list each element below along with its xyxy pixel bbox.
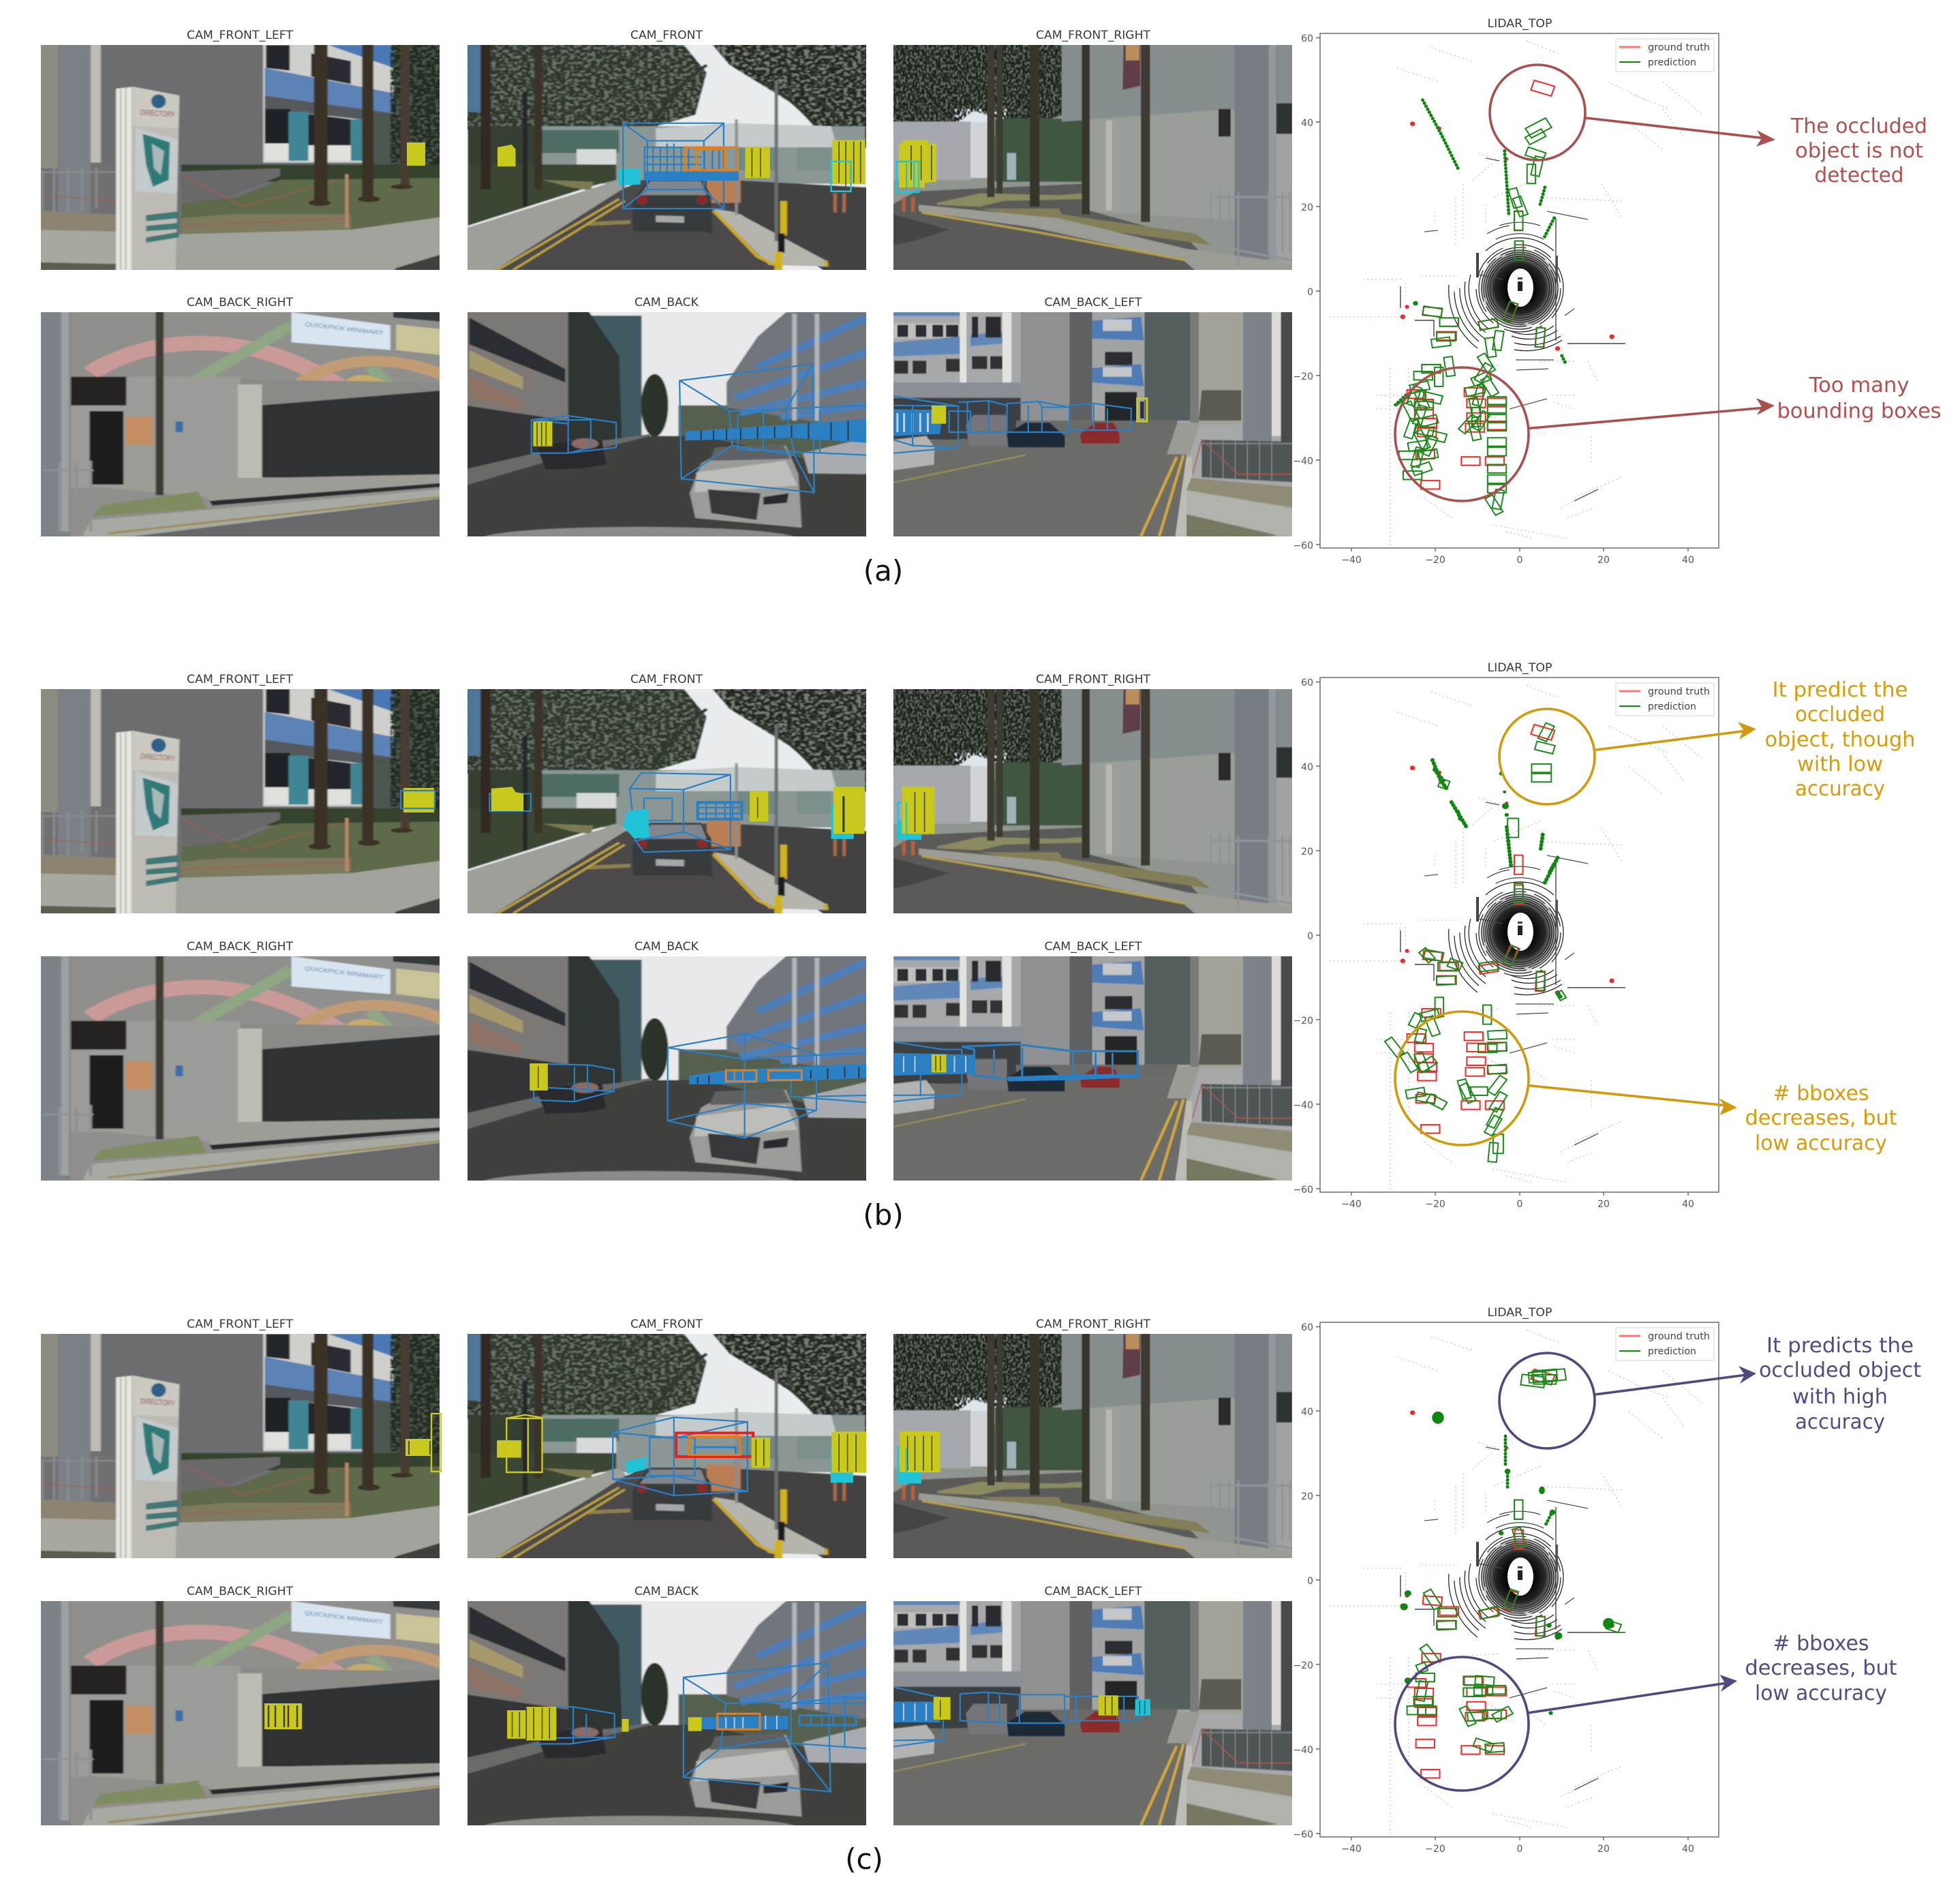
caption (b): (b) [863,1198,904,1232]
callout text: bboxes decrease (c) [1745,1632,1897,1705]
callout text: too many bounding boxes [1777,374,1941,423]
camera panel: CAM_FRONT_LEFT (a) [29,29,455,275]
caption (a): (a) [863,554,903,588]
legend [1616,683,1714,716]
axis ticks: 0 [1307,931,1313,942]
axis ticks: 20 [1301,847,1313,857]
camera panel: CAM_FRONT_LEFT (b) [29,673,455,919]
camera panel: CAM_FRONT_RIGHT (a): CAM_FRONT_RIGHT [1036,29,1151,42]
axis ticks: 20 [1301,1491,1313,1502]
camera panel: CAM_BACK_RIGHT (c): CAM_BACK_RIGHT [187,1585,294,1598]
arrow: too many boxes (a) [1528,398,1775,428]
axis ticks: −20 [1425,555,1445,566]
camera panel: CAM_FRONT (b) [453,673,882,927]
camera panel: CAM_FRONT_LEFT (b): CAM_FRONT_LEFT [187,673,294,686]
axis ticks: 40 [1301,1407,1313,1418]
camera panel: CAM_FRONT_RIGHT (c): CAM_FRONT_RIGHT [1036,1318,1151,1331]
axis ticks: 60 [1301,678,1313,688]
callout text: too many bounding boxes: bounding boxes [1777,399,1941,423]
camera panel: CAM_FRONT_RIGHT (a) [885,29,1299,284]
figure row (c) [29,1306,1921,1876]
axis ticks: −20 [1425,1199,1445,1210]
axis ticks: −20 [1293,1660,1313,1671]
callout text: occluded not detected: detected [1814,164,1904,187]
axis ticks: 40 [1682,1844,1694,1855]
callout ring: too many boxes (a) [1395,367,1529,501]
camera panel: CAM_FRONT_RIGHT (b): CAM_FRONT_RIGHT [1036,673,1151,686]
camera panel: CAM_FRONT (c) [453,1318,882,1572]
arrow: bboxes (c) [1528,1675,1737,1713]
camera panel: CAM_FRONT (c): CAM_FRONT [630,1318,703,1331]
LiDAR chart: LIDAR_TOP (c) [1293,1306,1719,1855]
camera panel: CAM_BACK_LEFT (a): CAM_BACK_LEFT [1044,296,1142,309]
axis ticks: 60 [1301,1322,1313,1333]
callout text: predicts occluded, low accuracy: with low [1797,752,1883,776]
camera panel: CAM_FRONT (a): CAM_FRONT [630,29,703,42]
camera panel: CAM_BACK (c) [453,1585,882,1840]
axis ticks: −40 [1341,1844,1362,1855]
callout text: predicts occluded, high accuracy: with high [1792,1385,1888,1409]
arrow: occluded object (b) [1595,722,1756,750]
callout text: bboxes decrease (c): decreases, but [1745,1656,1897,1680]
axis ticks: −20 [1425,1844,1445,1855]
legend: prediction [1648,1346,1696,1357]
axis ticks: −20 [1293,371,1313,382]
camera panel: CAM_BACK_RIGHT (c) [29,1585,453,1832]
callout text: bboxes decrease (b): decreases, but [1745,1106,1897,1130]
axis ticks: −40 [1293,456,1313,467]
camera panel: CAM_BACK_LEFT (c) [885,1585,1299,1832]
callout text: predicts occluded, low accuracy: accuracy [1795,777,1885,801]
camera panel: CAM_FRONT_LEFT (c) [29,1318,455,1564]
axis ticks: −40 [1293,1100,1313,1111]
legend: ground truth [1648,686,1710,697]
camera panel: CAM_BACK (a) [453,296,882,551]
callout text: bboxes decrease (b): low accuracy [1755,1131,1887,1155]
LiDAR chart: LIDAR_TOP (b) [1293,661,1719,1210]
axis ticks: −40 [1293,1745,1313,1756]
legend [1616,39,1714,72]
axis ticks: 40 [1682,1199,1694,1210]
arrow: occluded object (a) [1586,118,1775,147]
camera panel: CAM_BACK (b) [453,940,882,1196]
camera panel: CAM_FRONT_LEFT (a): CAM_FRONT_LEFT [187,29,294,42]
camera panel: CAM_FRONT_RIGHT (c) [885,1318,1299,1572]
axis ticks [1293,33,1694,566]
LiDAR chart: LIDAR_TOP (a): LIDAR_TOP [1487,17,1552,31]
axis ticks: 20 [1597,1844,1610,1855]
axis ticks: −40 [1341,555,1362,566]
camera panel: CAM_BACK_LEFT (c): CAM_BACK_LEFT [1044,1585,1142,1598]
axis ticks: 20 [1597,1199,1610,1210]
callout text: bboxes decrease (b) [1745,1082,1897,1155]
axis ticks: 0 [1307,1576,1313,1587]
axis ticks: −40 [1341,1199,1362,1210]
callout text: bboxes decrease (c): # bboxes [1773,1632,1869,1656]
axis ticks: 20 [1301,202,1313,213]
axis ticks [1293,678,1694,1210]
axis ticks: 0 [1517,555,1522,566]
callout text: predicts occluded, low accuracy [1765,678,1915,801]
legend: ground truth [1648,1331,1710,1342]
legend: prediction [1648,57,1696,68]
axis ticks: −20 [1293,1016,1313,1026]
callout ring: bboxes (b) [1395,1012,1529,1145]
camera panel: CAM_BACK (c): CAM_BACK [634,1585,699,1598]
axis ticks: 20 [1597,555,1610,566]
camera panel: CAM_FRONT_RIGHT (b) [885,673,1299,927]
callout text: occluded not detected: object is not [1795,139,1923,163]
callout text: predicts occluded, low accuracy: object, though [1765,728,1915,752]
camera panel: CAM_FRONT (a) [453,29,882,284]
camera panel: CAM_BACK_RIGHT (a): CAM_BACK_RIGHT [187,296,294,309]
LiDAR chart: LIDAR_TOP (c): LIDAR_TOP [1487,1306,1552,1320]
axis ticks [1293,1322,1694,1855]
callout text: predicts occluded, low accuracy: occluded [1795,703,1885,727]
arrow: occluded object (c) [1595,1366,1756,1395]
callout text: predicts occluded, high accuracy [1759,1334,1921,1434]
callout text: occluded not detected: The occluded [1790,115,1927,138]
camera panel: CAM_FRONT (b): CAM_FRONT [630,673,703,686]
callout text: predicts occluded, low accuracy: It predict the [1772,678,1908,702]
camera panel: CAM_BACK_LEFT (a) [885,296,1299,543]
callout ring: occluded object (a) [1490,65,1585,160]
legend: prediction [1648,701,1696,712]
camera panel: CAM_BACK (a): CAM_BACK [634,296,699,309]
LiDAR chart: LIDAR_TOP (a) [1293,17,1719,566]
legend [1616,1328,1714,1360]
callout text: predicts occluded, high accuracy: It predicts the [1766,1334,1914,1358]
caption (c): (c) [845,1842,883,1876]
axis ticks: 0 [1517,1199,1522,1210]
axis ticks: −60 [1293,541,1313,551]
legend: ground truth [1648,42,1710,53]
axis ticks: 0 [1517,1844,1522,1855]
camera panel: CAM_BACK_LEFT (b): CAM_BACK_LEFT [1044,940,1142,954]
arrow: bboxes (b) [1528,1085,1737,1115]
callout text: predicts occluded, high accuracy: accuracy [1795,1410,1885,1434]
camera panel: CAM_BACK_RIGHT (a) [29,296,453,543]
camera panel: CAM_BACK_RIGHT (b) [29,940,453,1187]
camera panel: CAM_BACK (b): CAM_BACK [634,940,699,954]
LiDAR chart: LIDAR_TOP (b): LIDAR_TOP [1487,661,1552,675]
callout ring: occluded object (c) [1499,1353,1595,1448]
camera panel: CAM_FRONT_LEFT (c): CAM_FRONT_LEFT [187,1318,294,1331]
axis ticks: 40 [1301,762,1313,773]
camera panel: CAM_BACK_LEFT (b) [885,940,1299,1187]
callout text: predicts occluded, high accuracy: occluded object [1759,1358,1921,1382]
callout text: too many bounding boxes: Too many [1808,374,1910,397]
callout ring: occluded object (b) [1499,709,1595,804]
camera panel: CAM_BACK_RIGHT (b): CAM_BACK_RIGHT [187,940,294,954]
callout text: occluded not detected [1790,115,1927,187]
axis ticks: 60 [1301,33,1313,44]
axis ticks: 40 [1301,118,1313,129]
figure row (b) [29,661,1921,1876]
axis ticks: 40 [1682,555,1694,566]
callout text: bboxes decrease (c): low accuracy [1755,1682,1887,1705]
callout text: bboxes decrease (b): # bboxes [1773,1082,1869,1106]
axis ticks: −60 [1293,1185,1313,1196]
axis ticks: −60 [1293,1829,1313,1840]
axis ticks: 0 [1307,287,1313,298]
callout ring: bboxes (c) [1395,1657,1529,1791]
